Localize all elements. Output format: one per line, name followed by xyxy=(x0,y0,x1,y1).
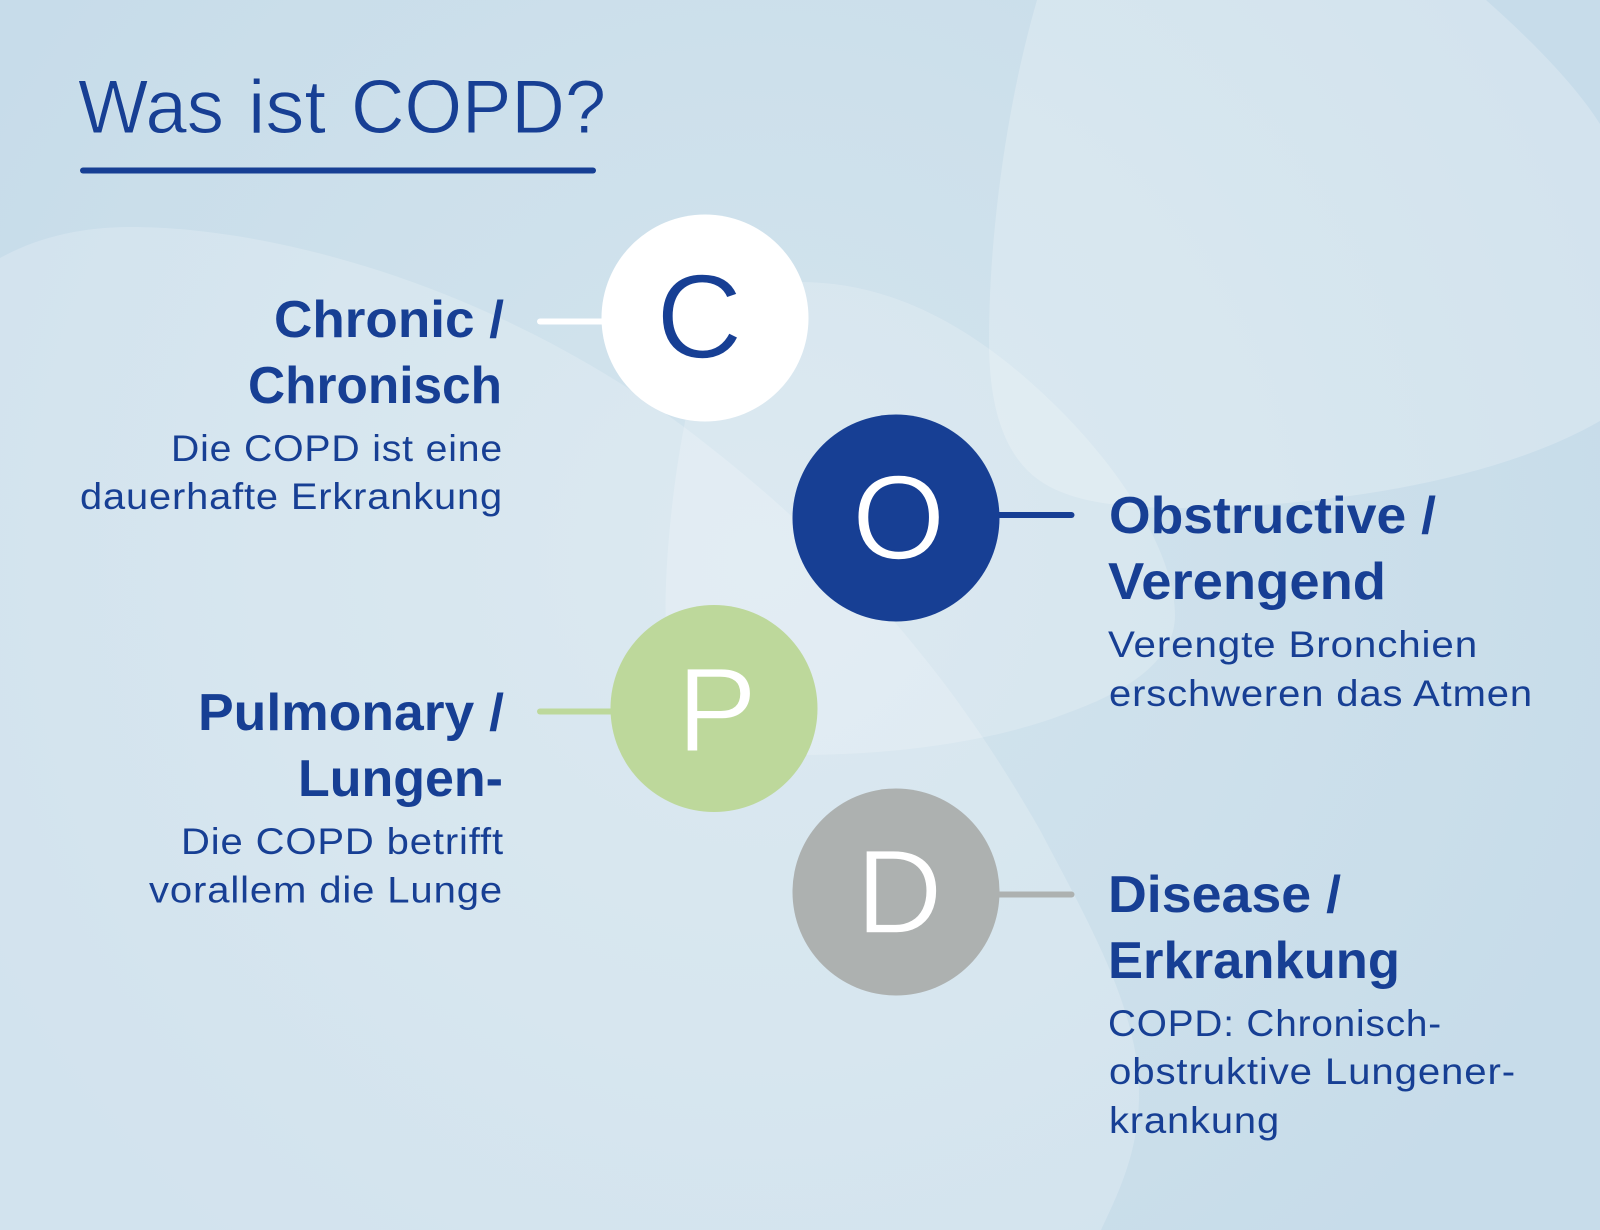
text block: Disease xyxy=(1108,866,1516,1141)
circle badge: C xyxy=(602,214,808,422)
circle badge: O: O xyxy=(852,451,945,585)
title xyxy=(78,65,606,150)
text block: Pulmonary xyxy=(149,684,504,910)
text block: Obstructive: Obstructive / xyxy=(1109,487,1436,545)
title: COPD? xyxy=(351,65,606,150)
title: ist xyxy=(248,65,326,150)
connector: C xyxy=(537,318,607,324)
text block: Obstructive: erschweren das Atmen xyxy=(1109,673,1533,714)
text block: Chronic: Die COPD ist eine xyxy=(171,428,503,469)
text block: Pulmonary: Die COPD betrifft xyxy=(181,821,504,862)
connector: O xyxy=(995,512,1074,518)
text block: Pulmonary: Lungen- xyxy=(298,750,503,808)
text block: Obstructive: Verengend xyxy=(1108,553,1386,611)
text block: Disease: krankung xyxy=(1109,1100,1280,1141)
text block: Chronic: Chronisch xyxy=(248,357,502,415)
text block: Pulmonary: Pulmonary / xyxy=(198,684,504,742)
text block: Disease: obstruktive Lungener- xyxy=(1109,1051,1516,1092)
circle badge: D: D xyxy=(856,825,943,959)
text block: Chronic: Chronic / xyxy=(274,291,504,349)
title: Was xyxy=(78,65,224,150)
text block: Obstructive: Verengte Bronchien xyxy=(1108,624,1478,665)
circle badge: O xyxy=(792,414,1000,622)
connector: P xyxy=(537,708,617,714)
circle badge: P: P xyxy=(677,643,757,777)
text block: Disease: Disease / xyxy=(1108,866,1341,924)
text block: Chronic: dauerhafte Erkrankung xyxy=(80,476,503,517)
text block: Chronic xyxy=(80,291,504,517)
text block: Disease: Erkrankung xyxy=(1108,932,1400,990)
circle badge: D xyxy=(792,788,1000,996)
title underline xyxy=(80,168,596,174)
circle badge: C: C xyxy=(656,250,743,384)
connector: D xyxy=(995,892,1074,898)
circle badge: P xyxy=(610,605,818,812)
text block: Disease: COPD: Chronisch- xyxy=(1108,1003,1442,1044)
text block: Pulmonary: vorallem die Lunge xyxy=(149,870,503,910)
text block: Obstructive xyxy=(1108,487,1533,714)
